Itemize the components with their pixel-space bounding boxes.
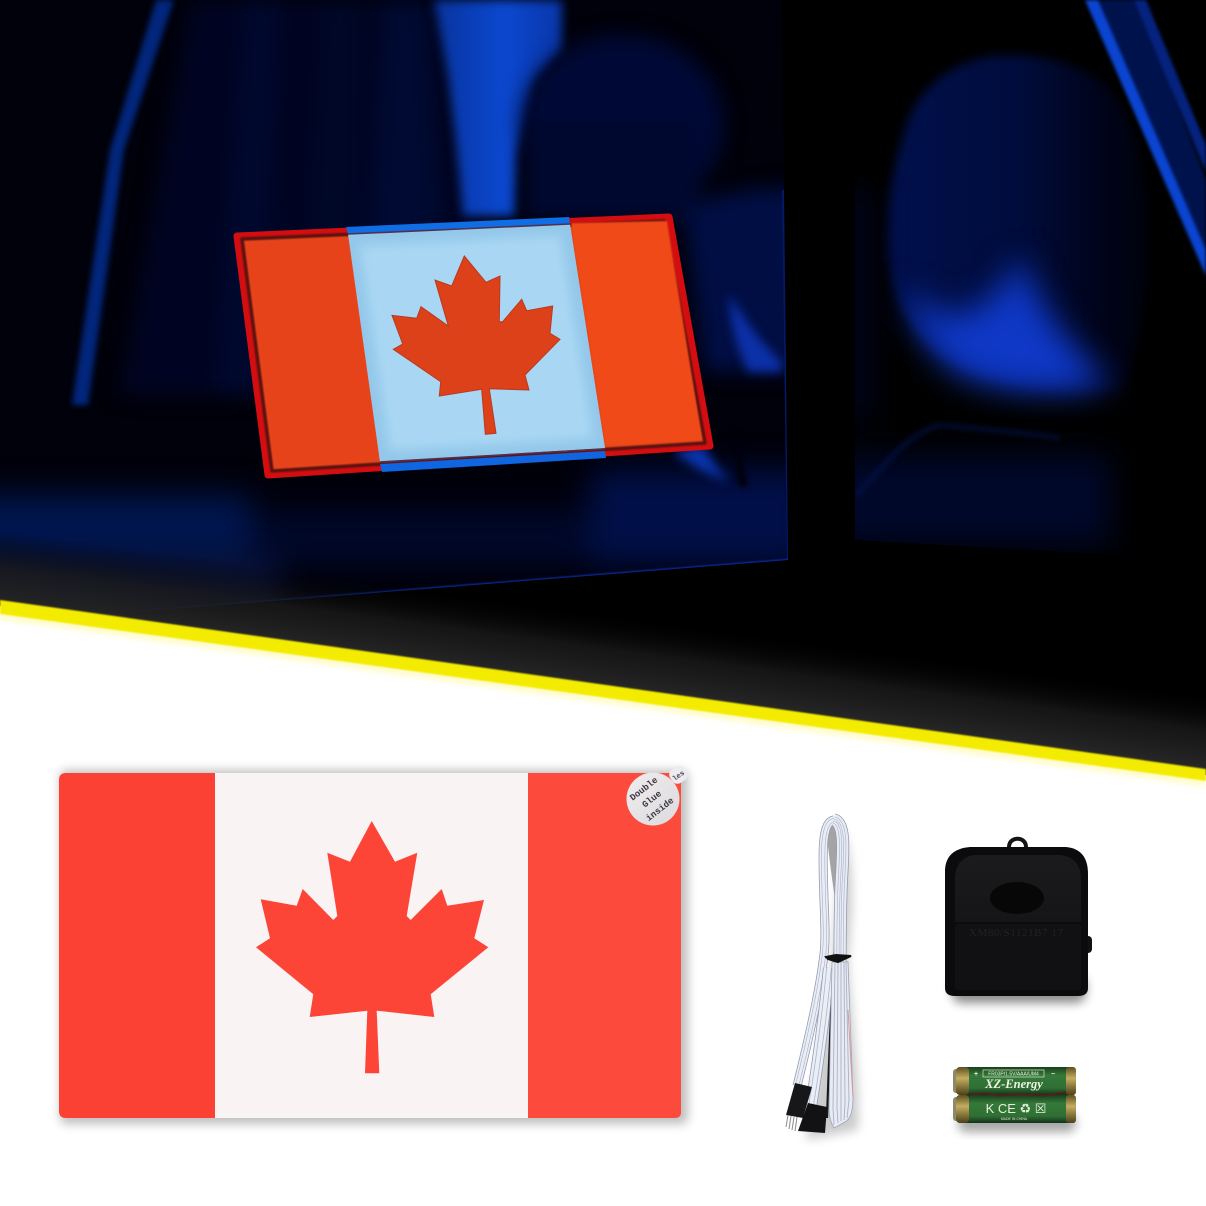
glowing Canadian flag on car window <box>237 217 710 475</box>
remote side button <box>1084 936 1092 953</box>
ribbon cable <box>786 820 858 1140</box>
glow flag top blue edge <box>346 217 570 234</box>
remote lower panel <box>955 924 1081 990</box>
window frame edge <box>783 190 788 560</box>
glow flag right band <box>571 221 702 446</box>
flag left red band <box>59 773 216 1118</box>
battery top: + <box>974 1071 978 1078</box>
glow flag white band <box>348 224 605 462</box>
flag shadow <box>60 770 688 1124</box>
cable black wire <box>827 822 838 1118</box>
remote oval button <box>990 882 1044 914</box>
yellow diagonal divider <box>0 600 1206 786</box>
cable middle strand <box>811 968 829 1106</box>
remote embossed label: XM80/S1121B7 17 <box>969 927 1064 939</box>
battery top: − <box>1051 1071 1055 1078</box>
band edge lines <box>348 224 570 234</box>
battery bottom: MADE IN CHINA <box>1001 1117 1028 1121</box>
double glue sticker <box>626 763 690 826</box>
remote control box <box>945 839 1092 1003</box>
glow flag dark inner border <box>242 221 705 471</box>
battery shadow <box>958 1114 1076 1132</box>
sticker text <box>628 775 676 824</box>
flag right red band <box>528 773 681 1118</box>
sticker tab: les <box>672 770 687 784</box>
flag maple leaf <box>256 821 488 1073</box>
cable zip tie <box>826 955 851 962</box>
remote body <box>945 847 1088 996</box>
battery bottom: K CE ♻ ☒ <box>986 1101 1046 1116</box>
glow flag left band <box>246 237 379 467</box>
battery top: FR03P/1.5V/AAA/UM4 <box>988 1072 1039 1078</box>
battery top <box>953 1067 1076 1095</box>
remote top panel <box>955 855 1081 922</box>
AAA batteries <box>953 1067 1076 1132</box>
cable connectors <box>786 1083 827 1133</box>
remote key loop <box>1009 839 1026 847</box>
product flag panel <box>59 770 688 1124</box>
battery top: XZ-Energy <box>984 1077 1043 1091</box>
glow flag bottom blue edge <box>380 451 606 472</box>
left window scene <box>0 0 810 630</box>
cable left strand <box>797 820 834 1086</box>
flag white band <box>215 773 529 1118</box>
top-right blue trim <box>1085 0 1206 276</box>
sticker disc <box>626 772 680 826</box>
cable main strand upper <box>834 820 843 968</box>
glow flag maple leaf <box>392 256 560 434</box>
sticker text: inside <box>644 796 676 824</box>
sticker text: Glue <box>641 789 664 810</box>
cable shadow <box>806 825 858 1140</box>
right window scene <box>825 55 1148 545</box>
dark fade above yellow line <box>0 535 1206 774</box>
glow flag red frame <box>237 217 710 475</box>
cable main strand lower <box>829 962 853 1128</box>
photo panel: dark car interior <box>0 0 1206 790</box>
sticker text: Double <box>628 775 660 803</box>
battery bottom <box>953 1092 1076 1123</box>
remote shadow <box>952 975 1086 1003</box>
cable inner loop <box>826 820 841 905</box>
